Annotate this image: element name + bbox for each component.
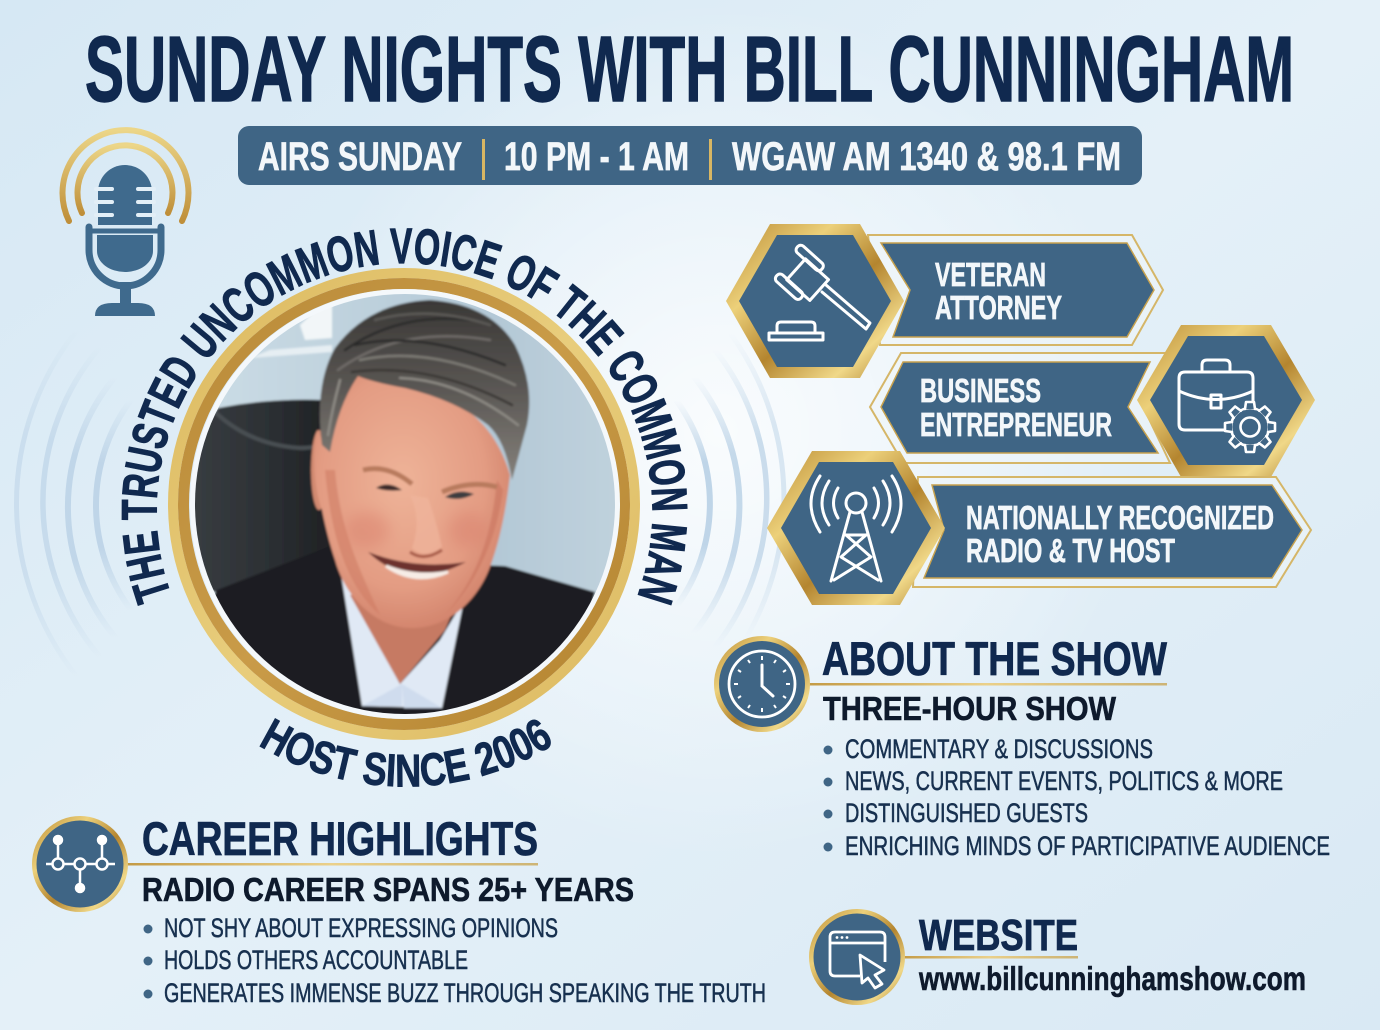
panel: website [809, 909, 1306, 1005]
icon: browser cursor [809, 909, 905, 1005]
credential: veteran attorney: ATTORNEY [935, 289, 1062, 326]
schedule banner: AIRS SUNDAY [258, 135, 462, 179]
panel: about the show: COMMENTARY & DISCUSSIONS [845, 734, 1153, 764]
panel: career highlights: HOLDS OTHERS ACCOUNTABLE [164, 945, 468, 975]
panel: career highlights: NOT SHY ABOUT EXPRESSING OPINIONS [164, 913, 558, 943]
credential: business entrepreneur: BUSINESS [920, 372, 1041, 409]
panel: website: WEBSITE [919, 911, 1078, 960]
icon: gavel [769, 244, 870, 340]
curved tagline: THE TRUSTED UNCOMMON VOICE OF THE COMMON MAN [122, 228, 688, 606]
panel: about the show: ABOUT THE SHOW [822, 632, 1168, 685]
schedule banner [238, 126, 1142, 185]
schedule banner: 10 PM - 1 AM [504, 135, 689, 179]
panel: about the show: THREE-HOUR SHOW [823, 690, 1117, 727]
host portrait [173, 273, 635, 735]
panel: career highlights: GENERATES IMMENSE BUZZ THROUGH SPEAKING THE TRUTH [164, 978, 766, 1008]
icon: radio tower [811, 476, 901, 581]
credential: radio and tv host [767, 451, 1311, 605]
credential: radio and tv host: RADIO & TV HOST [966, 532, 1175, 569]
host since label: HOST SINCE 2006 [260, 718, 551, 787]
icon: network nodes [32, 816, 128, 912]
panel: about the show: DISTINGUISHED GUESTS [845, 798, 1088, 828]
schedule banner: WGAW AM 1340 & 98.1 FM [732, 135, 1121, 179]
credential: business entrepreneur [870, 325, 1315, 477]
icon: microphone [63, 130, 189, 316]
icon: clock [714, 636, 810, 732]
credential: veteran attorney: VETERAN [935, 256, 1046, 293]
panel: about the show [714, 632, 1330, 861]
credential: business entrepreneur: ENTREPRENEUR [920, 406, 1112, 443]
panel: career highlights: RADIO CAREER SPANS 25+ YEARS [142, 871, 634, 908]
icon: briefcase and gear [1179, 360, 1275, 452]
panel: career highlights [32, 812, 766, 1008]
credential: veteran attorney [726, 224, 1163, 378]
panel: career highlights: CAREER HIGHLIGHTS [142, 812, 538, 865]
